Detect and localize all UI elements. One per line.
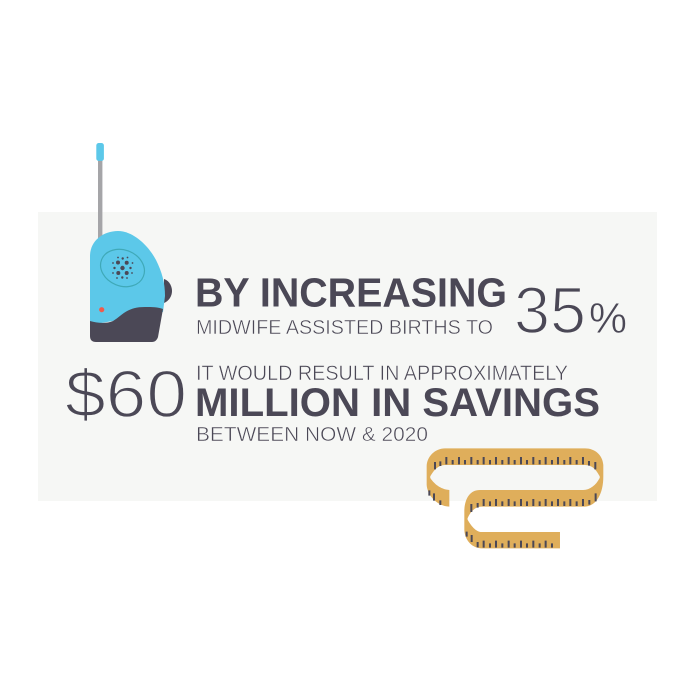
text: midwife assisted births to: MIDWIFE ASSISTED BIRTHS TO [196, 316, 493, 339]
stat: $60: $60 [65, 357, 187, 432]
tape band [427, 448, 603, 548]
monitor base [90, 307, 163, 342]
stat: 35%: 35 [514, 273, 586, 347]
monitor side knob [164, 279, 172, 303]
monitor body [90, 231, 165, 325]
tape tick marks [429, 457, 596, 548]
stat: 35%: % [589, 295, 627, 343]
monitor antenna tip [96, 143, 104, 161]
monitor speaker holes [112, 257, 133, 279]
heading: million in savings: MILLION IN SAVINGS [195, 381, 600, 425]
stat: 35% [514, 273, 627, 347]
monitor speaker ring [95, 243, 150, 293]
heading: by increasing: BY INCREASING [195, 270, 507, 316]
text: between now and 2020: BETWEEN NOW & 2020 [196, 423, 428, 446]
icon: measuring tape [427, 448, 603, 548]
icon: baby monitor [90, 143, 172, 342]
text: it would result in approximately: IT WOULD RESULT IN APPROXIMATELY [196, 362, 568, 385]
monitor red light [99, 307, 104, 312]
panel: background [38, 212, 657, 501]
monitor antenna rod [98, 160, 102, 242]
